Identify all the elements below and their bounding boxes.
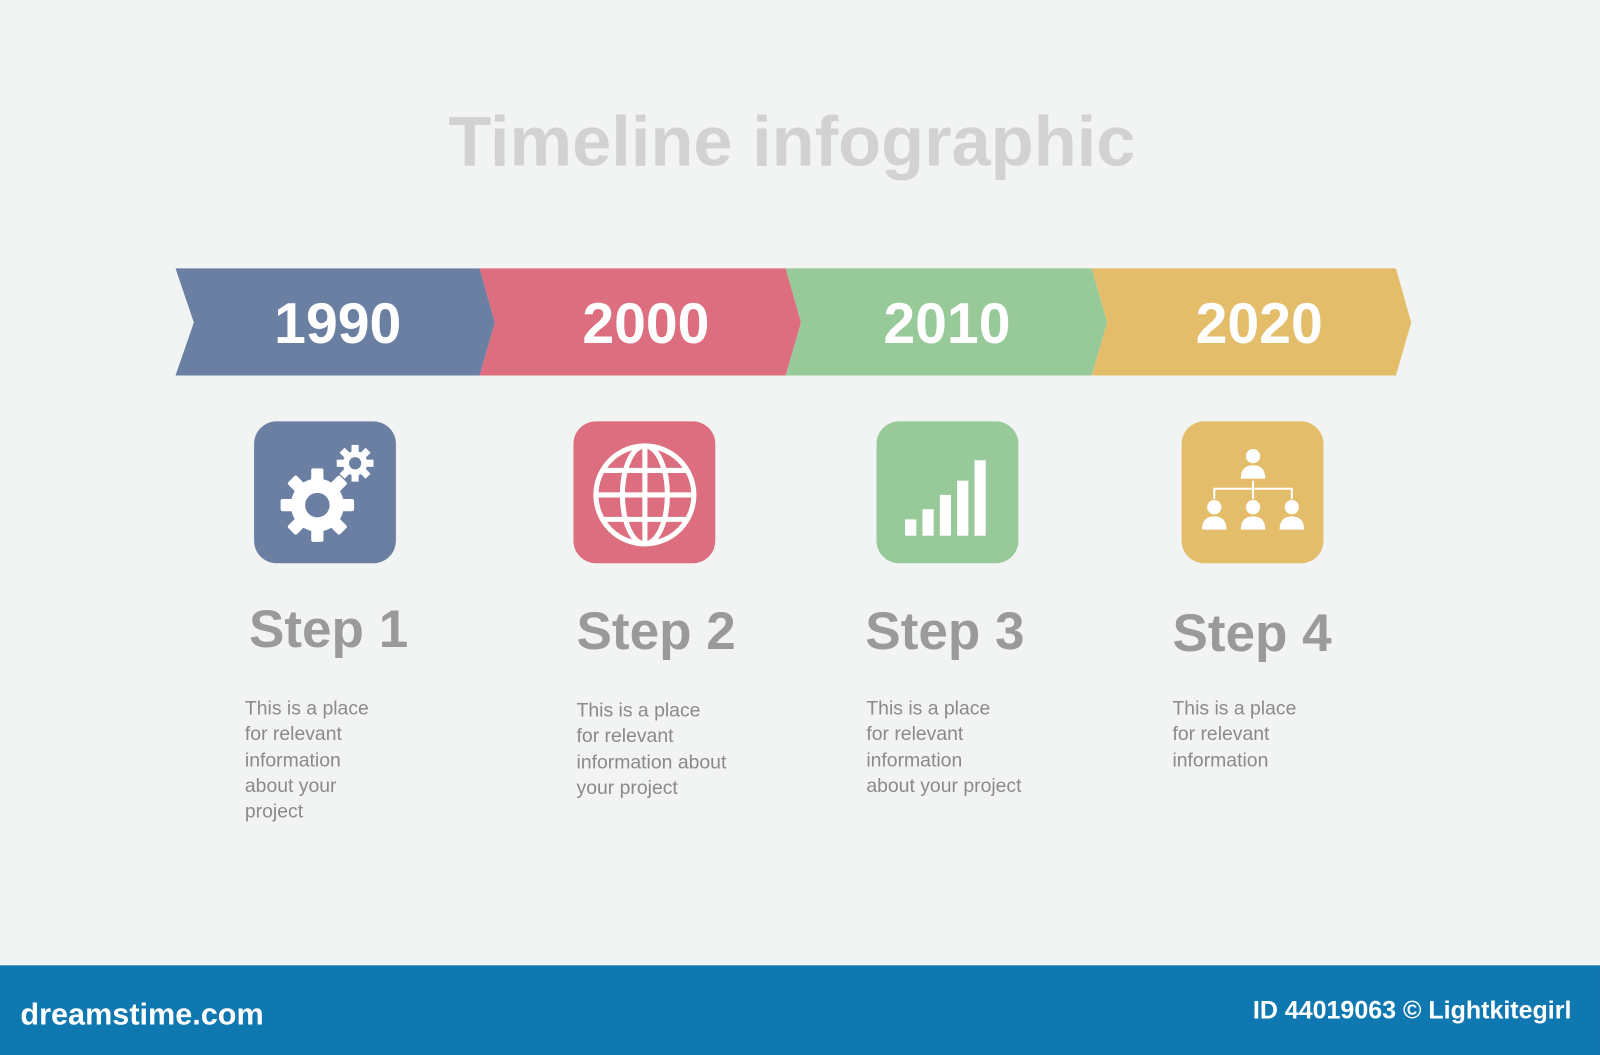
step 4 description xyxy=(1172,698,1296,771)
footer bar xyxy=(0,965,1600,1055)
step 2 description: This is a place xyxy=(577,700,700,721)
step 1 heading: Step 1 xyxy=(249,600,408,659)
arrow: 1990 xyxy=(176,268,495,376)
year 2010: 2010 xyxy=(883,291,1010,355)
step 2 description: for relevant xyxy=(577,726,674,747)
title: Timeline infographic xyxy=(448,102,1135,181)
icon: gears xyxy=(254,421,396,563)
arrow: 2000 xyxy=(480,268,801,376)
step 3 heading: Step 3 xyxy=(865,602,1025,661)
step 1 description: This is a place xyxy=(245,698,369,719)
step 2 description: your project xyxy=(577,777,678,799)
step 3 description xyxy=(866,698,1022,797)
step 3 description: This is a place xyxy=(866,698,990,719)
step 1 description: information xyxy=(245,750,341,771)
step 4 description: information xyxy=(1172,750,1268,771)
step 2 description xyxy=(576,700,726,799)
footer credit: ID 44019063 © Lightkitegirl xyxy=(1253,997,1571,1024)
step 1 description: about your xyxy=(245,775,337,797)
step 1 description: for relevant xyxy=(245,724,342,745)
year 2000: 2000 xyxy=(582,291,709,355)
step 3 description: about your project xyxy=(866,775,1022,797)
step 4 description: for relevant xyxy=(1172,724,1269,745)
year 1990: 1990 xyxy=(274,291,401,355)
step 1 description xyxy=(245,698,369,823)
icon: org chart xyxy=(1182,421,1323,563)
arrow: 2010 xyxy=(786,268,1107,376)
footer logo: dreamstime.com xyxy=(20,998,264,1032)
step 3 description: for relevant xyxy=(866,724,963,745)
step 4 description: This is a place xyxy=(1172,698,1296,719)
icon: bar chart xyxy=(877,421,1018,563)
timeline arrows xyxy=(176,268,1412,376)
step 4 heading: Step 4 xyxy=(1172,604,1332,663)
step 2 heading: Step 2 xyxy=(577,602,736,661)
step 2 description: information about xyxy=(577,752,726,773)
step 1 description: project xyxy=(245,801,303,823)
icon: globe xyxy=(573,421,715,563)
year 2020: 2020 xyxy=(1196,291,1323,355)
step 3 description: information xyxy=(866,750,962,771)
arrow: 2020 xyxy=(1092,268,1411,376)
